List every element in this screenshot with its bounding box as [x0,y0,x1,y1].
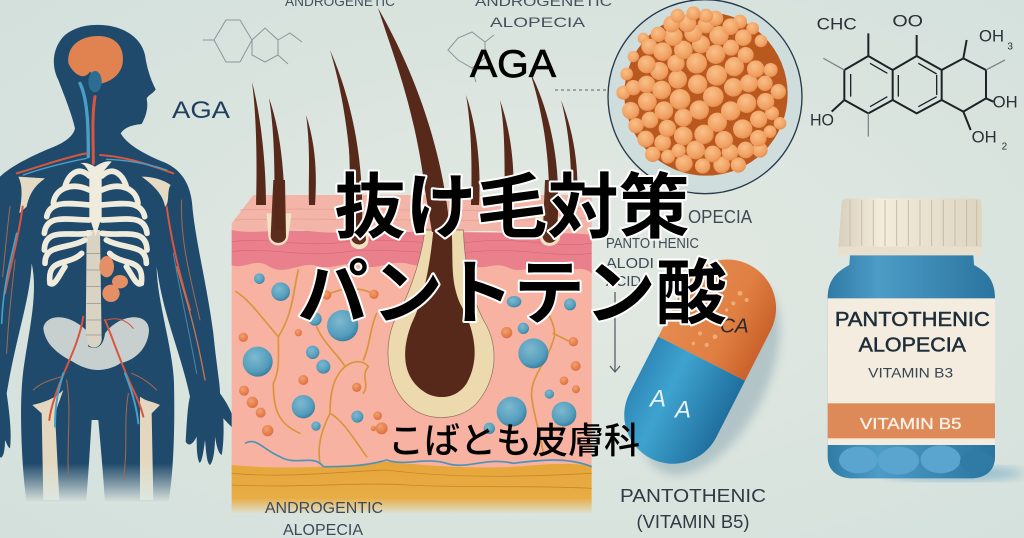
blue half [607,337,745,481]
bottle label text: VITAMIN B5 [860,416,962,433]
bottle label text: PANTOTHENIC [835,308,990,331]
pills inside bottle [839,445,993,475]
brain [68,36,123,83]
bottle shadow [883,466,1023,481]
capsule speckles [692,291,749,347]
bottom label: androgentic alopecia: ANDROGENTIC [265,500,383,517]
shoulder and arm bones [18,177,171,213]
right ribs [102,171,147,284]
anatomy figure: human body [0,25,236,503]
pelvis [43,317,149,370]
chemical labels: 3 [1007,41,1013,52]
small follicles [267,180,560,249]
chemical labels: OH [993,92,1018,111]
grey bonds [823,58,1005,137]
main title line 2: パントテン酸 [297,255,727,334]
main long hair [378,8,450,232]
sphere base [624,12,788,176]
bottle cap [838,198,982,255]
dashed leader line [555,89,610,91]
overlay: AGA: AGA [470,43,556,86]
top label: androgenetic alopecia: ALOPECIA [490,14,586,30]
chemical labels: 2 [1002,141,1008,152]
left ribs [44,171,89,284]
bottom label: pantothenic vitamin b5 [620,486,766,532]
main title line 1: 抜け毛対策 [334,169,690,248]
bonds [832,33,993,130]
bottle label [828,298,995,445]
enclosing circle [608,0,802,194]
cap base band [838,247,982,255]
cap ribs [850,200,977,246]
capsule [607,243,793,481]
clinic name: こばとも皮膚科 [388,420,640,461]
hair strands above skin [252,8,577,232]
sternum [80,161,112,237]
chemical labels: OH [979,26,1004,45]
neck vessels [17,83,173,175]
molecule diagram: top left [203,20,494,82]
capsule shadow [611,256,809,497]
kidney organ [99,256,128,302]
dermis layer [232,257,592,470]
bottom label: pantothenic vitamin b5: (VITAMIN B5) [636,512,750,532]
blue nerve line [245,442,592,467]
fat layer texture [232,470,592,488]
spine segments [86,253,101,335]
pantothenic labels behind title [606,207,752,290]
pantothenic labels behind title: ACID [606,273,641,290]
spine [86,230,102,347]
capsule labels [648,315,749,423]
epidermis top layer [232,195,592,235]
pantothenic labels behind title: ALODI [606,255,654,272]
bottom label: androgentic alopecia [265,500,383,538]
chemical structure diagram [810,12,1018,152]
inner ear structure [88,71,102,92]
leg bones [32,390,160,500]
bottle label text [835,308,990,433]
skin wave lines [232,208,592,255]
bottle body [828,255,995,478]
ribcage [44,171,147,284]
label: AGA beside body: AGA [172,97,230,124]
bottle label text: VITAMIN B3 [868,364,953,380]
chemical labels [810,12,1018,152]
capsule labels: CA [720,315,749,338]
chemical labels: HO [810,110,834,129]
chemical labels: CHC [817,14,857,33]
molecule sphere cluster [608,0,1018,194]
blue cells [243,273,576,434]
orange cells [239,290,581,436]
capsule labels: A [648,386,666,413]
label orange band [828,403,995,438]
bottom label: pantothenic vitamin b5: PANTOTHENIC [620,486,766,506]
pelvis and leg vessels [33,317,157,480]
capsule labels: A [673,396,691,423]
chemical labels: OO [892,12,923,31]
body silhouette [0,25,236,503]
pantothenic labels behind title: OPECIA [688,207,752,227]
pantothenic labels behind title: PANTOTHENIC [606,235,699,252]
fat layer [232,462,592,513]
large hair bulb [405,230,475,397]
orange half [658,243,793,381]
yellow nerve branches [236,270,573,463]
chemical labels: OH [972,128,997,147]
scalp cross-section panel [232,180,592,513]
arm vessels [2,200,205,380]
large hair follicle sheath [388,230,494,418]
dark pink upper dermis [232,230,592,273]
thin hairs [252,50,577,230]
arrow: down [610,292,620,372]
capsule and bottle group [607,198,1023,497]
top label: androgenetic alopecia [475,0,612,30]
spheres [616,6,786,174]
bottle label text: ALOPECIA [859,333,966,356]
